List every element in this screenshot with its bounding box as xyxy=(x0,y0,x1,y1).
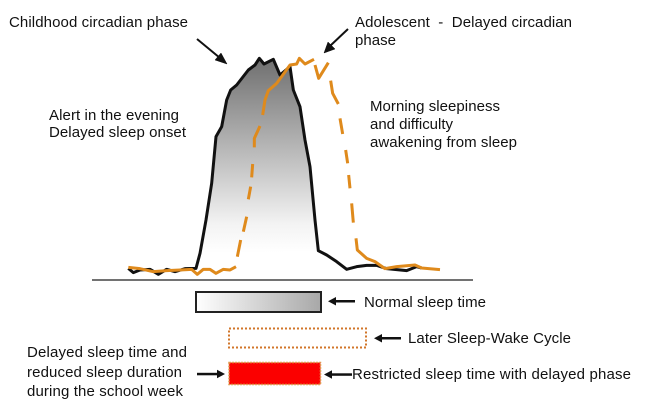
adolescent curve xyxy=(128,58,440,274)
heading: adolescent delayed circadian phase xyxy=(355,14,572,49)
arrow: childhood to curve xyxy=(197,39,227,64)
label: restricted sleep time: Restricted sleep time with delayed phase xyxy=(352,366,631,383)
text: delayed sleep time: Delayed sleep time and xyxy=(27,344,187,361)
text: morning sleepiness: and difficulty xyxy=(370,116,454,133)
childhood curve xyxy=(128,58,422,274)
text: alert in the evening: Delayed sleep onset xyxy=(49,124,187,141)
heading: childhood circadian phase: Childhood circadian phase xyxy=(9,14,188,31)
arrow: normal sleep time xyxy=(328,297,355,306)
chart: circadian phase curves xyxy=(128,58,440,274)
label: normal sleep time: Normal sleep time xyxy=(364,294,486,311)
text: delayed sleep time: during the school week xyxy=(27,383,184,400)
heading: adolescent delayed circadian phase: Adolescent - Delayed circadian xyxy=(355,14,572,31)
heading: adolescent delayed circadian phase: phase xyxy=(355,32,396,49)
arrow: restricted sleep time xyxy=(324,370,352,379)
legend bar: restricted sleep time xyxy=(229,362,320,384)
shaded area under childhood curve xyxy=(200,58,318,253)
text: morning sleepiness: Morning sleepiness xyxy=(370,98,500,115)
text: alert in the evening: Alert in the evening xyxy=(49,107,179,124)
legend bar: later sleep-wake cycle xyxy=(229,328,366,348)
legend bar: normal sleep time xyxy=(196,292,321,312)
label: later sleep-wake cycle: Later Sleep-Wake Cycle xyxy=(408,330,571,347)
arrow: later sleep-wake cycle xyxy=(374,334,401,342)
arrow: to restricted bar xyxy=(197,370,225,378)
axis line xyxy=(92,279,473,281)
text: delayed sleep time xyxy=(27,344,187,400)
text: alert in the evening xyxy=(49,107,187,141)
arrow: adolescent to curve xyxy=(324,29,348,53)
text: morning sleepiness: awakening from sleep xyxy=(370,134,517,151)
text: morning sleepiness xyxy=(370,98,517,151)
text: delayed sleep time: reduced sleep duration xyxy=(27,364,182,381)
